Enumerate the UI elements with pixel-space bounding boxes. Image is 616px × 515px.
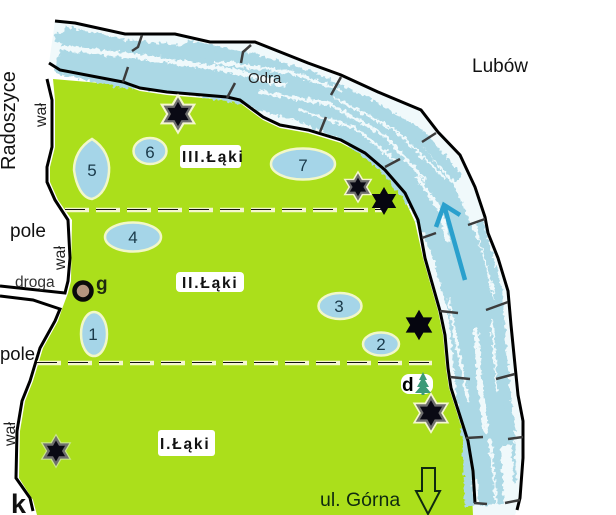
label ul. Gorna: ul. Górna xyxy=(320,489,400,511)
outer river bank xyxy=(55,21,523,510)
road arrow xyxy=(416,468,440,514)
meadow area xyxy=(19,79,473,515)
label I meadows xyxy=(158,430,215,456)
pond 4 xyxy=(105,222,161,252)
river Odra xyxy=(49,21,523,515)
lower left embankment xyxy=(0,296,60,511)
pond 1: 1 xyxy=(88,325,98,344)
star east upper xyxy=(345,173,371,201)
label pole upper: pole xyxy=(10,221,46,242)
label Lubów: Lubów xyxy=(472,56,528,77)
star south east xyxy=(414,394,448,432)
label II meadows: II.Łąki xyxy=(182,275,239,292)
pond 2: 2 xyxy=(376,335,386,354)
flow arrow xyxy=(436,205,465,280)
pond 6 xyxy=(134,138,166,164)
pond 3 xyxy=(318,293,362,319)
label wal middle: wał xyxy=(52,246,69,271)
star south west xyxy=(42,435,70,467)
black star east xyxy=(406,311,432,339)
pond 5 xyxy=(74,139,109,199)
label wal lower: wał xyxy=(2,422,19,447)
pond 5: 5 xyxy=(87,161,97,180)
pond 6: 6 xyxy=(145,143,155,162)
marker g xyxy=(74,274,108,300)
star north xyxy=(162,96,194,132)
inner river bank xyxy=(49,63,475,503)
pond 3: 3 xyxy=(334,297,344,316)
pond 1 xyxy=(81,312,107,356)
label pole lower: pole xyxy=(0,343,35,364)
pond 7: 7 xyxy=(298,156,308,175)
label Odra: Odra xyxy=(248,70,282,87)
groynes xyxy=(123,35,523,504)
left embankment xyxy=(0,79,70,293)
boundary between III and II xyxy=(65,207,385,212)
boundary between II and I xyxy=(37,360,432,365)
marker d with tree: d xyxy=(402,375,414,396)
label wal upper: wał xyxy=(33,103,50,128)
black star xyxy=(373,189,395,213)
label I meadows: I.Łąki xyxy=(160,436,210,453)
pond 7 xyxy=(271,148,335,180)
pond 4: 4 xyxy=(128,228,138,247)
marker d with tree xyxy=(401,372,433,396)
marker g: g xyxy=(96,274,108,295)
label III meadows: III.Łąki xyxy=(182,149,245,166)
label droga: droga xyxy=(15,274,55,291)
pond 2 xyxy=(363,332,399,356)
